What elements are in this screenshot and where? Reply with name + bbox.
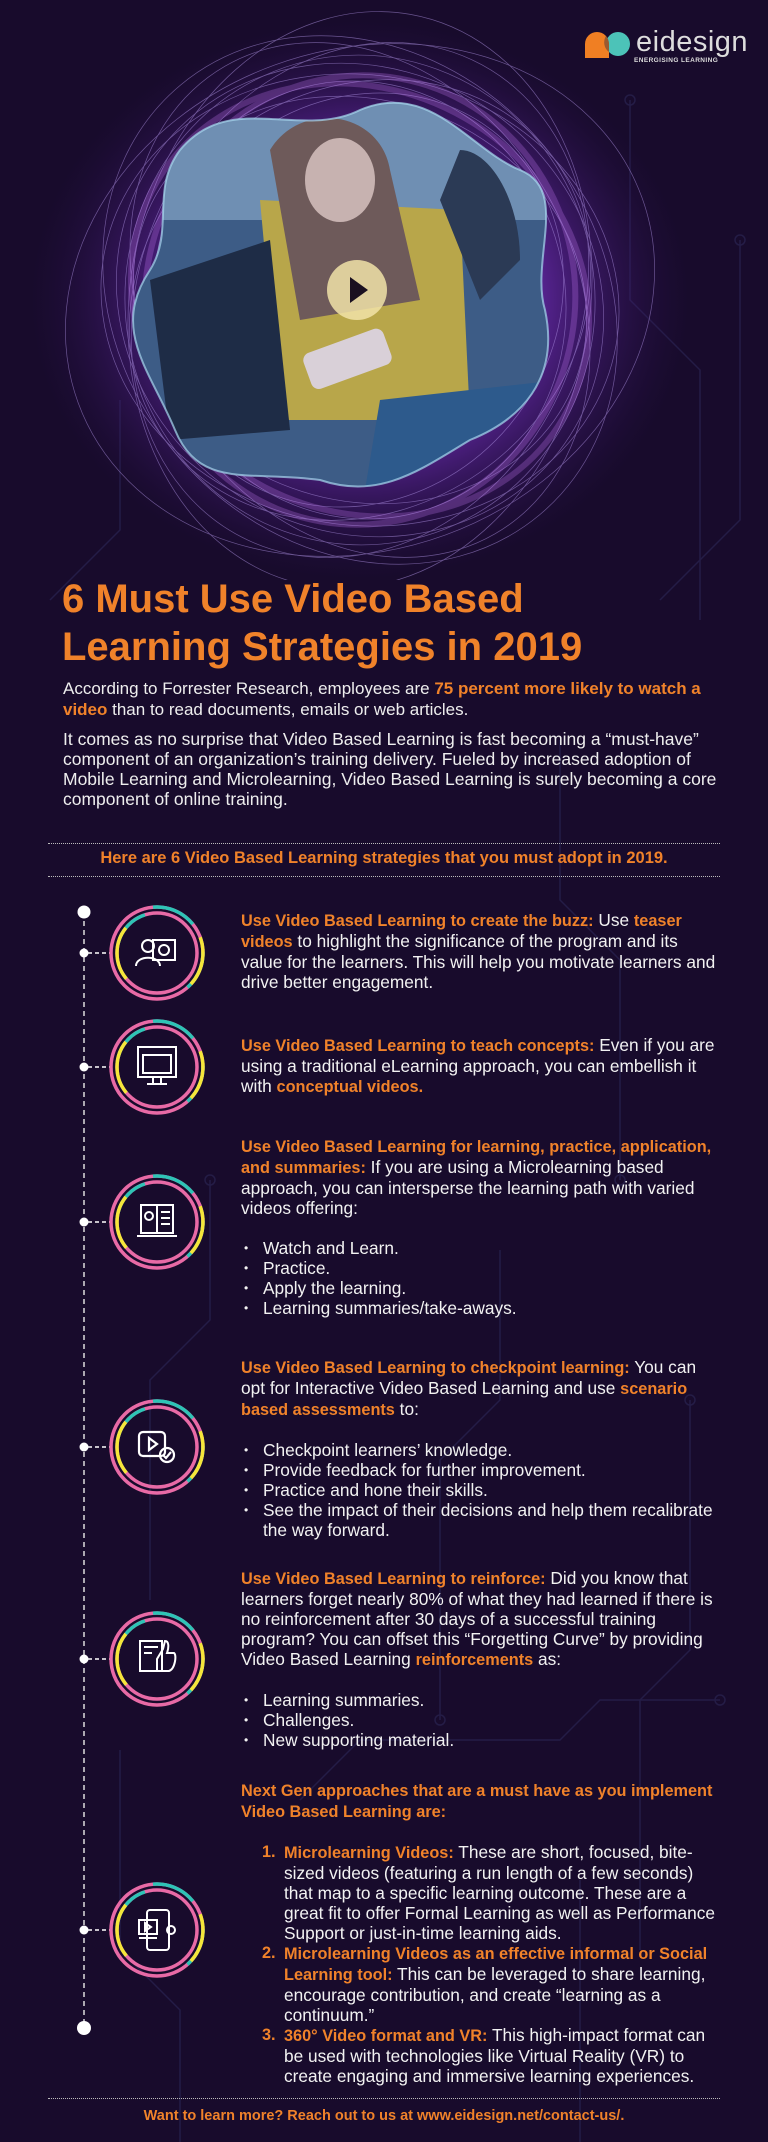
text 3: Use Video Based Learning for learning, practice, application, and summaries: If you are using a Microlearning based approach, you can intersperse the learning path with varied videos offering: [241, 1138, 711, 1218]
text 3: Apply the learning. [263, 1278, 406, 1298]
text 5: Use Video Based Learning to reinforce: Did you know that learners forget nearly 80% of what they had learned if there is no reinforcement after 30 days of a successful training program? You can offset this “Forgetting Curve” by providing Video Based Learning reinforcements as: [241, 1568, 713, 1669]
text 6: next gen approaches: 360° Video format and VR: This high-impact format can be used with technologies like Virtual Reality (VR) to create engaging and immersive learning experiences. [284, 2025, 705, 2086]
title: Learning Strategies in 2019 [62, 625, 582, 669]
text 4: See the impact of their decisions and help them recalibrate the way forward. [263, 1500, 713, 1540]
text 5: Challenges. [263, 1710, 354, 1730]
text 6: next gen approaches: 3. [262, 2026, 276, 2044]
text 3 [241, 1138, 711, 1318]
text 4 [241, 1357, 713, 1540]
text 6: next gen approaches: 2. [262, 1944, 276, 1962]
icon 5: reinforce thumbs up [109, 1611, 205, 1707]
intro paragraph 1: According to Forrester Research, employees are 75 percent more likely to watch a video than to read documents, emails or web articles. [63, 679, 701, 719]
text 6: next gen approaches: 1. [262, 1843, 276, 1861]
text 5 [241, 1568, 713, 1750]
title: 6 Must Use Video Based [62, 577, 524, 621]
text 4: Checkpoint learners’ knowledge. [263, 1440, 512, 1460]
logo: ENERGISING LEARNING [634, 57, 718, 64]
text 5: Learning summaries. [263, 1690, 424, 1710]
text 6: next gen approaches [241, 1782, 715, 2086]
text 3: Learning summaries/take-aways. [263, 1298, 517, 1318]
text 4: Practice and hone their skills. [263, 1480, 488, 1500]
text 6: next gen approaches: Microlearning Videos as an effective informal or Social Learning tool: This can be leveraged to share learning, encourage contribution, and create “learning as a continuum.” [284, 1945, 707, 2025]
text 4: Use Video Based Learning to checkpoint learning: You can opt for Interactive Video Based Learning and use scenario based assessments to: [241, 1357, 696, 1419]
text 4: Provide feedback for further improvement. [263, 1460, 586, 1480]
text 3: Practice. [263, 1258, 330, 1278]
logo: eidesign [636, 26, 748, 58]
text 3: Watch and Learn. [263, 1238, 399, 1258]
hero illustration: photo inside wavy rings [60, 11, 661, 580]
icon 2: concepts [109, 1019, 205, 1115]
intro paragraph 2: It comes as no surprise that Video Based Learning is fast becoming a “must-have” component of an organization’s training delivery. Fueled by increased adoption of Mobile Learning and Microlearning, Video Based Learning is surely becoming a core component of online training. [63, 729, 716, 809]
text 6: next gen approaches: Microlearning Videos: These are short, focused, bite-sized videos (featuring a run length of a few seconds) that map to a specific learning outcome. These are a great fit to offer Formal Learning as well as Performance Support or just-in-time learning aids. [284, 1842, 715, 1943]
logo [585, 26, 748, 64]
section heading: Here are 6 Video Based Learning strategies that you must adopt in 2019. [100, 849, 668, 867]
icon 3: learning book [109, 1174, 205, 1270]
icon 6: mobile video [109, 1882, 205, 1978]
text 5: New supporting material. [263, 1730, 454, 1750]
footer: Want to learn more? Reach out to us at www.eidesign.net/contact-us/. [144, 2108, 624, 2124]
text 6: next gen approaches: Next Gen approaches that are a must have as you implement Video Based Learning are: [241, 1782, 712, 1821]
timeline [77, 906, 110, 2035]
title [62, 577, 582, 669]
icon: play button [327, 260, 387, 320]
icon 4: checkpoint video [109, 1399, 205, 1495]
text 1: Use Video Based Learning to create the buzz: Use teaser videos to highlight the significance of the program and its value for the learners. This will help you motivate learners and drive better engagement. [241, 910, 715, 992]
icon 1: teaser video [109, 905, 205, 1001]
text 2: Use Video Based Learning to teach concepts: Even if you are using a traditional eLearning approach, you can embellish it with conceptual videos. [241, 1035, 715, 1096]
